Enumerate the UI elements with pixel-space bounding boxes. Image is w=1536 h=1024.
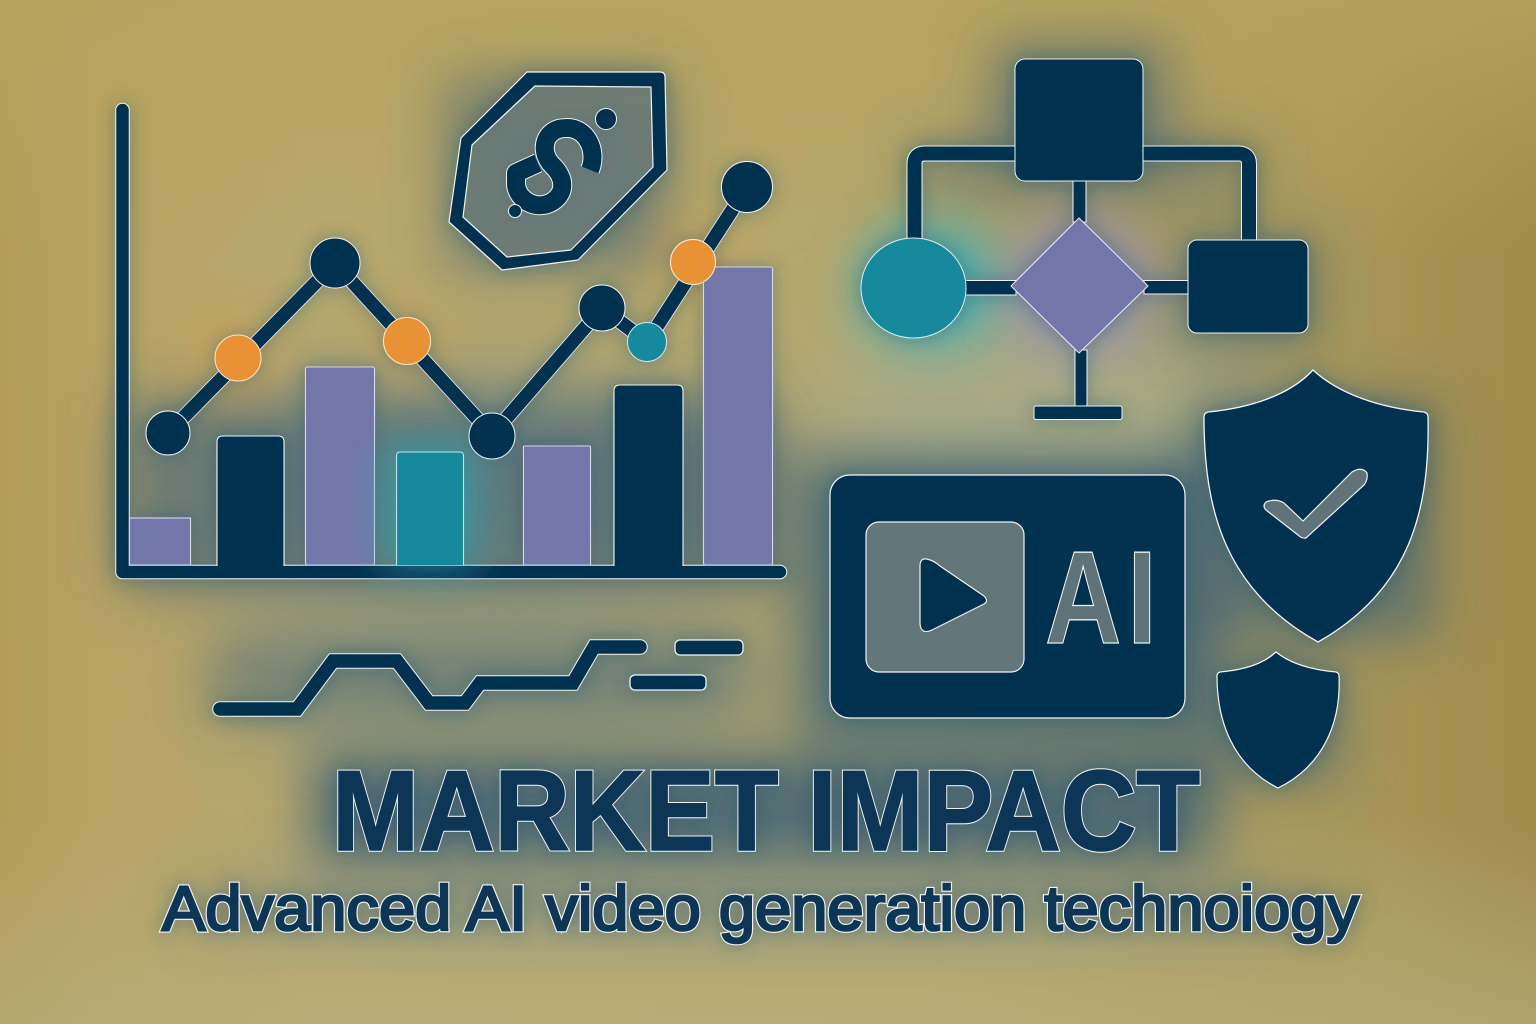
right process box <box>1188 240 1308 333</box>
bar 4 <box>396 452 464 565</box>
icon: small shield <box>1217 652 1339 788</box>
flowchart connectors <box>914 154 1249 245</box>
tag outline <box>449 72 667 270</box>
chart: bars and trend line <box>122 110 780 572</box>
bar 4 teal glow <box>384 445 476 565</box>
flowchart <box>861 59 1308 420</box>
bar 2 <box>217 436 284 566</box>
title: MARKET IMPACT <box>332 748 1200 875</box>
title: MARKET IMPACT <box>332 748 1200 875</box>
bar 6 <box>614 385 683 566</box>
line nodes: orange <box>215 240 716 381</box>
purple decision diamond <box>1011 218 1148 353</box>
icon: large shield with check <box>1204 370 1428 642</box>
tag dots <box>596 108 616 130</box>
check mark <box>1264 469 1367 538</box>
chart axes <box>122 110 780 572</box>
teal start node <box>861 238 966 338</box>
flowchart glows <box>860 220 1149 350</box>
dash 1 <box>675 640 743 655</box>
dash 2 <box>630 675 706 690</box>
AI label: A <box>1045 525 1121 672</box>
bar 5 <box>524 446 590 565</box>
colored glows <box>202 222 729 394</box>
video frame <box>866 522 1024 672</box>
dollar glyph <box>516 128 593 205</box>
soft navy halos behind the icons <box>120 40 1435 925</box>
trend line <box>168 187 747 435</box>
top process box <box>1015 59 1143 181</box>
line node: teal <box>628 322 666 362</box>
tag interior <box>463 86 653 257</box>
bar 3 <box>306 367 374 565</box>
line nodes: navy <box>146 162 772 459</box>
play button <box>920 559 986 632</box>
subtitle: Advanced AI video generation technoiogy <box>162 874 1360 944</box>
subtitle: Advanced AI video generation technoiogy <box>162 874 1360 944</box>
icon: price tag with dollar sign <box>449 72 667 270</box>
icon: AI video panel <box>830 475 1185 718</box>
squiggle line with dashes <box>220 640 743 709</box>
AI label: I <box>1127 525 1157 672</box>
bar 1 <box>130 518 190 565</box>
bar 7 <box>704 267 772 565</box>
